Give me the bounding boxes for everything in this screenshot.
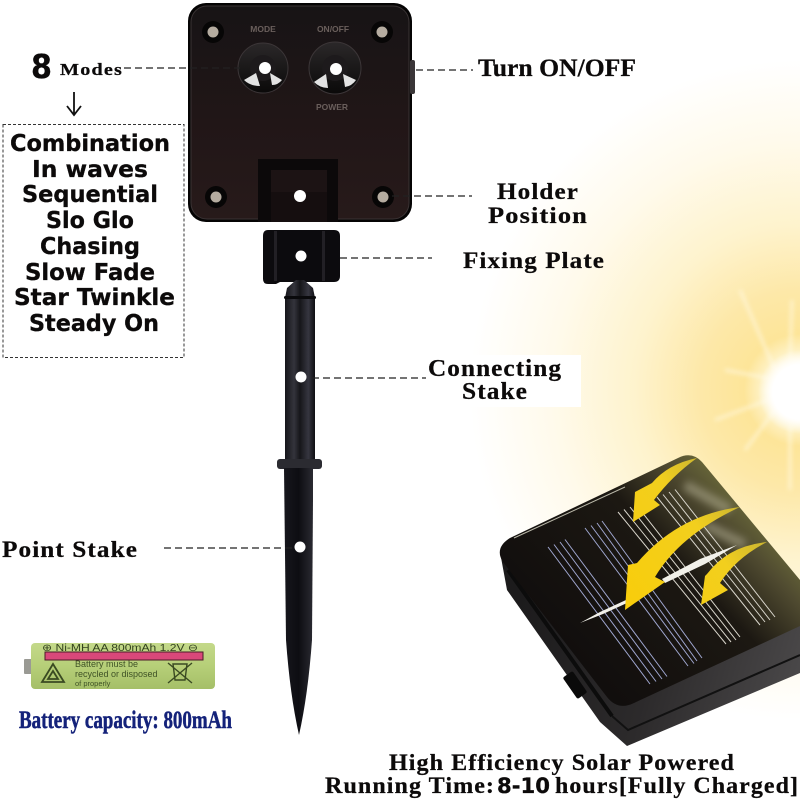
leader line: modes xyxy=(124,67,240,69)
leader line: holder position xyxy=(392,195,472,197)
caption: running time: hours[Fully Charged] xyxy=(555,773,799,798)
power label: POWER xyxy=(316,102,348,112)
mode button xyxy=(238,43,288,93)
label: turn on/off: Turn ON/OFF xyxy=(478,55,636,82)
corner screws xyxy=(202,21,394,208)
panel: mode list: Slow Fade xyxy=(25,260,155,286)
panel highlight xyxy=(685,485,745,545)
label: point stake: Point Stake xyxy=(2,537,138,562)
panel: mode list: Steady On xyxy=(29,311,159,337)
caption: solar powered: High Efficiency Solar Powered xyxy=(389,750,735,775)
label: connecting stake xyxy=(426,355,581,407)
label: holder position xyxy=(488,179,588,228)
side switch xyxy=(563,671,587,699)
glare on solar cells xyxy=(580,545,737,623)
fixing plate xyxy=(263,230,340,284)
battery instructions: recycled or disposed xyxy=(75,669,158,679)
on/off button xyxy=(309,42,361,94)
battery recycling mark xyxy=(42,664,64,682)
label: holder position: Position xyxy=(488,203,588,228)
label: holder position: Holder xyxy=(497,179,579,204)
panel: mode list: Star Twinkle xyxy=(14,285,175,311)
leader line: point stake xyxy=(164,547,296,549)
control box xyxy=(188,3,415,222)
leader line: connecting stake xyxy=(312,377,426,379)
point stake xyxy=(277,459,322,735)
battery instructions: Battery must be xyxy=(75,659,138,669)
leader line: fixing plate xyxy=(340,257,432,259)
panel: mode list: Combination xyxy=(10,131,170,157)
solar panel box xyxy=(500,455,800,746)
heading: 8 modes: 8 xyxy=(31,47,52,86)
battery bin mark xyxy=(168,663,192,683)
label: fixing plate: Fixing Plate xyxy=(463,248,605,273)
panel: mode list: Slo Glo xyxy=(46,208,134,234)
on/off label: ON/OFF xyxy=(317,24,349,34)
label: battery capacity: Battery capacity: 800mAh xyxy=(19,707,232,734)
caption: running time: 8-10 xyxy=(497,774,550,798)
arrow: down to mode list xyxy=(67,92,81,115)
yellow sunlight arrows xyxy=(625,458,767,610)
holder slot xyxy=(258,159,338,222)
panel: mode list: In waves xyxy=(32,157,148,183)
solar cell lines xyxy=(548,490,775,684)
heading: 8 modes: Modes xyxy=(60,60,123,79)
battery instructions xyxy=(75,659,158,688)
label: connecting stake: Stake xyxy=(462,379,528,405)
label: connecting stake: Connecting xyxy=(428,356,562,382)
caption: running time: Running Time: xyxy=(325,773,495,798)
mode label: MODE xyxy=(250,24,276,34)
battery instructions: of properly xyxy=(75,679,111,688)
connecting stake xyxy=(284,280,316,460)
caption: running time xyxy=(325,773,799,798)
panel: mode list xyxy=(3,124,184,358)
panel: mode list: Sequential xyxy=(22,182,158,208)
on/off side switch xyxy=(410,60,415,94)
leader line: turn on/off xyxy=(416,69,473,71)
icon: rechargeable battery xyxy=(24,643,215,689)
solar panel face xyxy=(500,455,800,706)
icon: rechargeable battery: ⊕ Ni-MH AA 800mAh 1.2V ⊖ xyxy=(42,643,198,654)
panel: mode list: Chasing xyxy=(40,234,140,260)
heading: 8 modes xyxy=(31,47,123,86)
